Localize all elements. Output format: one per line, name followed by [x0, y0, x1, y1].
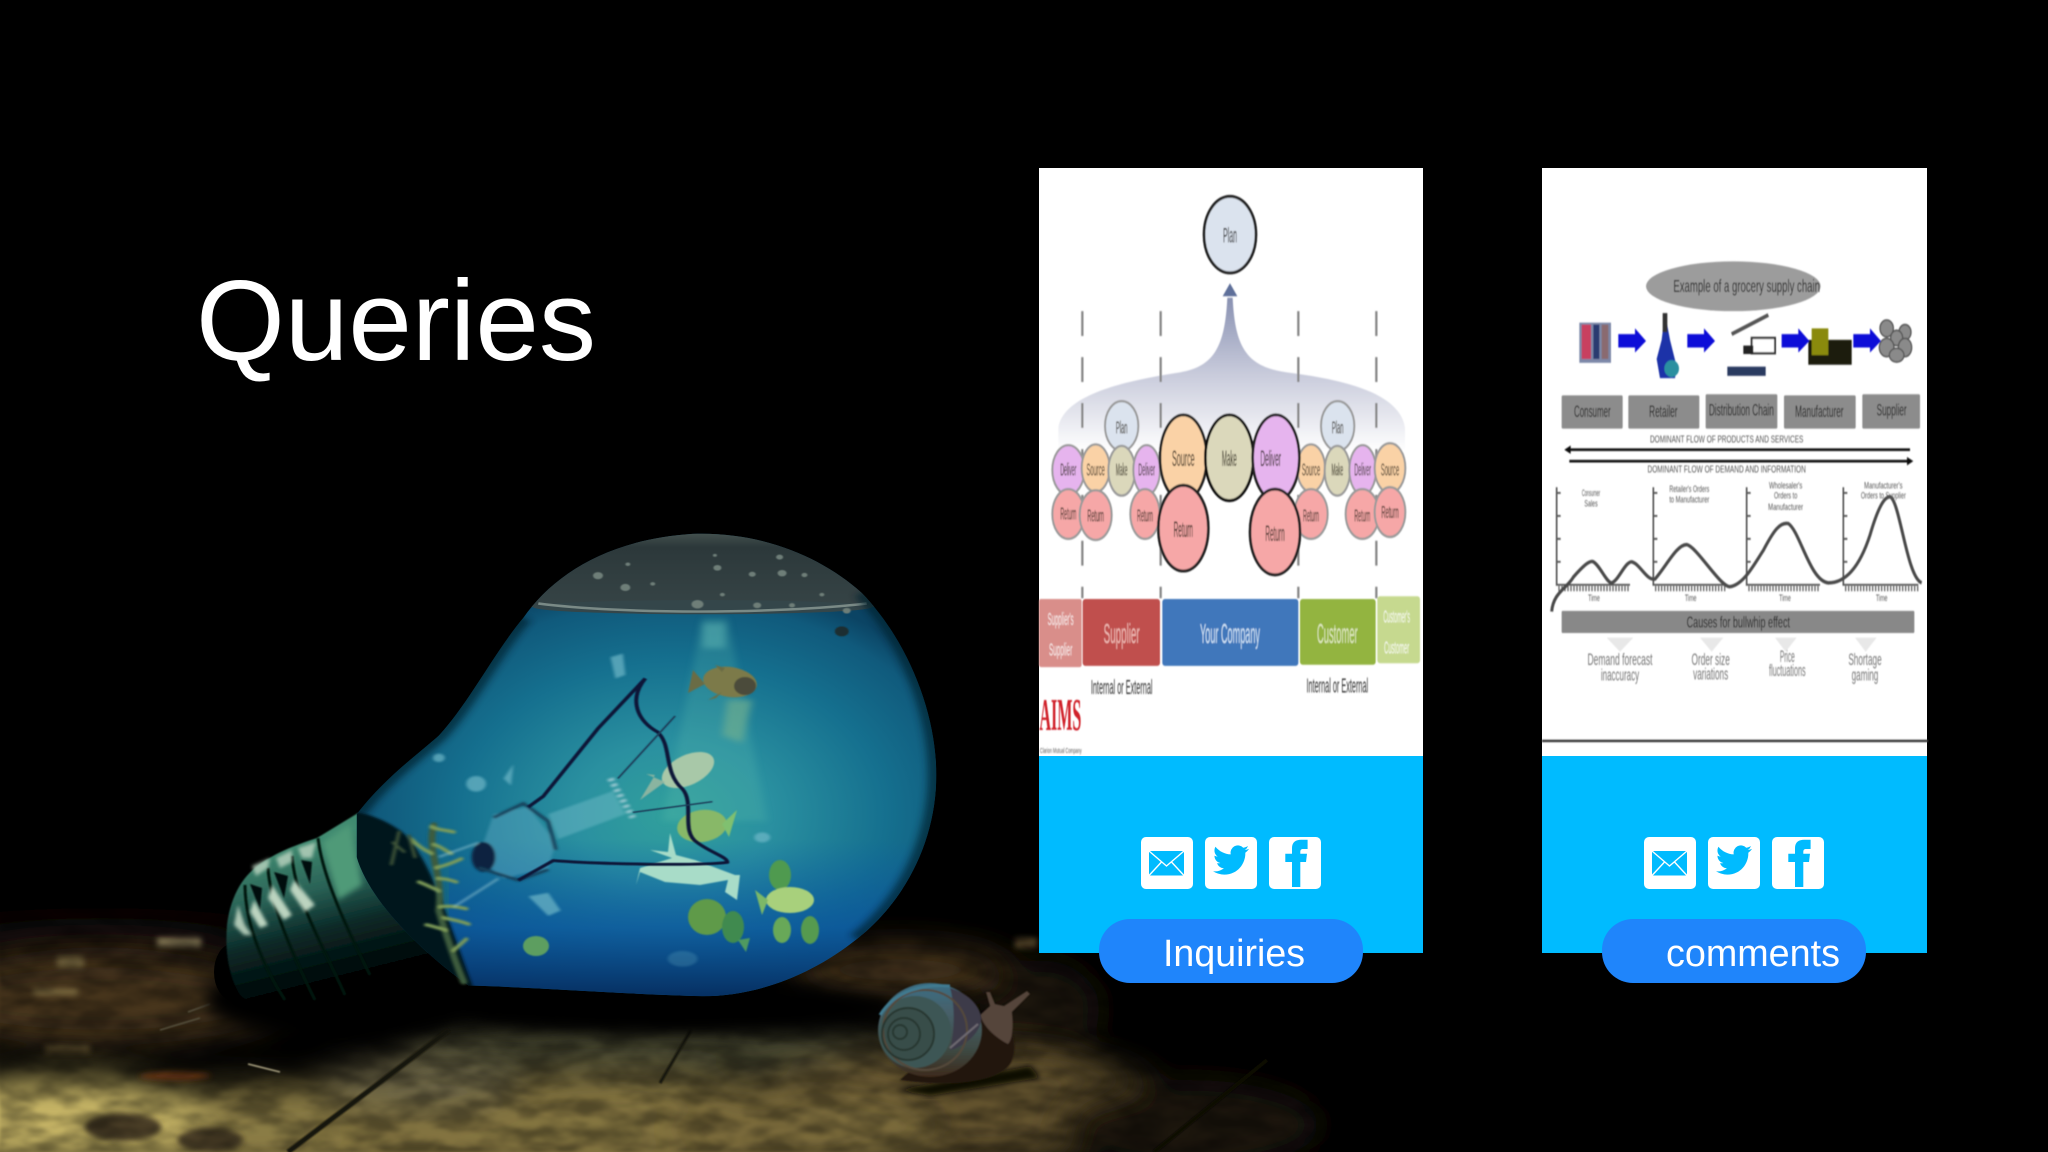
air pocket with droplets: [532, 534, 874, 637]
causes list: inaccuracy: [1601, 667, 1639, 685]
process labels: Source: [1086, 461, 1105, 480]
icon: facebook: [1772, 837, 1824, 889]
value chain blocks: Customer: [1317, 620, 1358, 649]
bulb screw base: [214, 813, 470, 1018]
icon: email: [1141, 837, 1193, 889]
snail shadow: [895, 1066, 1040, 1096]
bulb shadow: [205, 962, 895, 1038]
thread highlights: [234, 842, 316, 935]
dark notches: [250, 860, 312, 910]
process labels: Make: [1331, 461, 1343, 480]
bullwhip chart: Retailer's Orders: [1669, 484, 1709, 494]
grocery supply chain diagram: Retailer: [1649, 403, 1677, 421]
title: Queries: [196, 258, 596, 385]
process labels: Plan: [1116, 419, 1127, 438]
collar highlight: [322, 824, 362, 900]
causes list: Price: [1780, 648, 1795, 666]
process labels: Return: [1174, 518, 1193, 542]
card panel: [1039, 168, 1423, 953]
value chain blocks: Supplier: [1049, 641, 1073, 660]
flow arrows: DOMINANT FLOW OF DEMAND AND INFORMATION: [1647, 464, 1806, 475]
bullwhip chart: Orders to Supplier: [1861, 490, 1906, 501]
snail shell: [878, 983, 982, 1077]
chain pictures: [1579, 313, 1912, 378]
grocery supply chain diagram: Manufacturer: [1795, 403, 1843, 421]
bullwhip chart: Time: [1779, 592, 1791, 603]
process labels: Plan: [1332, 419, 1343, 438]
process labels: Return: [1060, 505, 1076, 524]
stage boxes: [1562, 394, 1920, 429]
bullwhip chart: [1552, 480, 1922, 612]
button: inquiries: [1099, 919, 1363, 983]
causes list: [1587, 638, 1882, 685]
supply chain scope diagram: [1039, 168, 1423, 756]
plant: [392, 825, 469, 982]
dark plant zone: [349, 811, 474, 989]
bullwhip chart: Manufacturer: [1768, 502, 1803, 512]
plank gaps: [160, 1004, 1267, 1152]
process labels: Return: [1137, 507, 1153, 526]
causes list: Shortage: [1848, 651, 1882, 669]
causes list: fluctuations: [1769, 662, 1806, 680]
value chain blocks: [1039, 596, 1420, 667]
process labels: Make: [1116, 461, 1127, 480]
snail: [878, 983, 1040, 1096]
bullwhip chart: Manufacturer's: [1864, 480, 1902, 490]
value chain blocks: Supplier: [1104, 620, 1140, 649]
process labels: Return: [1354, 507, 1370, 526]
bullwhip chart: Orders to: [1774, 490, 1797, 501]
fish: [523, 663, 819, 956]
causes list: variations: [1693, 666, 1728, 684]
grocery supply chain diagram: Distribution Chain: [1709, 402, 1774, 420]
causes list: gaming: [1852, 667, 1878, 685]
icon: facebook: [1269, 837, 1321, 889]
plan node: Plan: [1223, 224, 1237, 248]
card: comments: [1542, 168, 1928, 983]
supply chain scope diagram: Customer's: [1383, 607, 1410, 627]
grocery supply chain diagram: Supplier: [1877, 402, 1907, 420]
wood texture: [0, 900, 1400, 1152]
bullwhip chart: Time: [1876, 592, 1888, 603]
card: inquiries: [1039, 168, 1423, 983]
bullwhip chart: Wholesaler's: [1769, 480, 1802, 490]
blue arrows: [1618, 328, 1881, 352]
process labels: Return: [1087, 507, 1104, 526]
bullwhip chart: Time: [1588, 592, 1600, 603]
bullwhip chart: Consumer: [1582, 487, 1600, 498]
card panel: [1542, 168, 1927, 953]
filament wire: [518, 678, 727, 880]
snail body: [900, 991, 1030, 1083]
causes list: Order size: [1691, 651, 1730, 669]
grocery supply chain diagram: Consumer: [1574, 403, 1611, 421]
process labels: Deliver: [1354, 461, 1371, 480]
causes bar: Causes for bullwhip effect: [1687, 614, 1790, 632]
glass edge shade: [357, 593, 936, 939]
process labels: Deliver: [1260, 447, 1281, 471]
lit wood patches: [33, 938, 1037, 1152]
plan node: [1204, 196, 1256, 273]
button: comments: [1602, 919, 1866, 983]
heading ellipse: Example of a grocery supply chain: [1673, 277, 1820, 296]
process labels: [1060, 419, 1399, 546]
glass bulb: [356, 534, 936, 996]
bullwhip chart: Time: [1685, 592, 1697, 603]
supply chain scope diagram: Internal or External: [1306, 675, 1368, 698]
supply chain scope diagram: Internal or External: [1091, 676, 1152, 699]
thread ribs: [245, 838, 370, 1000]
process labels: Make: [1222, 447, 1237, 471]
process labels: Deliver: [1138, 461, 1155, 480]
process circles: [1052, 401, 1405, 575]
flow arrows: [1564, 434, 1913, 475]
causes list: Demand forecast: [1587, 651, 1653, 669]
flow arrows: DOMINANT FLOW OF PRODUCTS AND SERVICES: [1650, 434, 1803, 445]
light shafts: [663, 618, 767, 821]
wooden floor: [0, 900, 1400, 1152]
icon: email: [1644, 837, 1696, 889]
process labels: Return: [1303, 507, 1319, 526]
icon: twitter: [1205, 837, 1257, 889]
icon: twitter: [1708, 837, 1760, 889]
grocery supply chain diagram: [1542, 168, 1928, 756]
supply chain scope diagram: Source: [1381, 461, 1399, 480]
AIMS logo: [1039, 691, 1082, 755]
process labels: Source: [1172, 447, 1195, 471]
causes bar: [1562, 611, 1914, 633]
process labels: Deliver: [1060, 461, 1076, 480]
button: inquiries: Inquiries: [1163, 933, 1305, 975]
light bulb aquarium: [214, 521, 956, 1018]
supply chain scope diagram: AIMS: [1039, 691, 1081, 741]
button: comments: comments: [1666, 933, 1840, 975]
AIMS logo: Clarion Mutual Company: [1040, 748, 1082, 755]
value chain blocks: Customer: [1384, 639, 1409, 658]
process labels: Return: [1265, 522, 1285, 546]
process labels: Source: [1302, 461, 1320, 480]
value chain blocks: Your Company: [1200, 620, 1260, 649]
filament glass stem: [439, 778, 633, 907]
heading ellipse: [1646, 261, 1821, 311]
value chain blocks: Supplier's: [1048, 610, 1074, 629]
supply chain scope diagram: Return: [1381, 503, 1399, 522]
bullwhip chart: Sales: [1584, 498, 1598, 508]
bullwhip chart: to Manufacturer: [1669, 494, 1709, 505]
